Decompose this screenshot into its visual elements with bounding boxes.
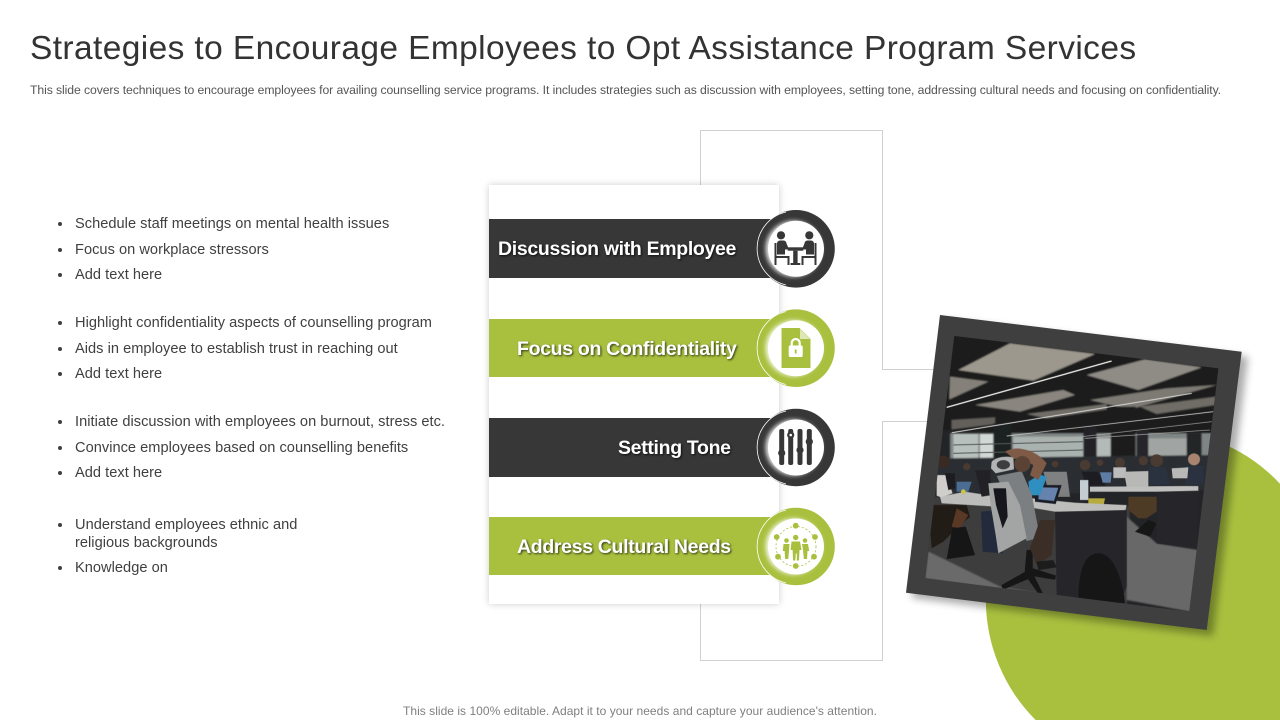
- ceiling: [943, 336, 1218, 434]
- title: Strategies to Encourage Employees to Opt Assistance Program Services: [30, 30, 1136, 67]
- rear trouser legs: [981, 510, 1003, 553]
- bullet: Understand employees ethnic and: [75, 517, 297, 533]
- left person: [937, 475, 953, 497]
- bar: focus on confidentiality: [489, 319, 775, 377]
- bar: setting tone: Setting Tone: [618, 437, 731, 459]
- shoes and legs: [1030, 520, 1055, 565]
- raised arms and head: [1005, 449, 1047, 480]
- rear desk: [1090, 486, 1198, 492]
- bullet: Initiate discussion with employees on burnout, stress etc.: [75, 414, 445, 430]
- bullet: Focus on workplace stressors: [75, 242, 269, 258]
- bullet: Aids in employee to establish trust in reaching out: [75, 341, 398, 357]
- bullet: Add text here: [75, 465, 162, 481]
- backpack: [947, 527, 975, 559]
- bullet: Add text here: [75, 366, 162, 382]
- framed photo: [906, 315, 1252, 640]
- bullet: Highlight confidentiality aspects of counselling program: [75, 315, 432, 331]
- icon: locked document: [757, 309, 835, 387]
- connector frame: [700, 130, 934, 661]
- bar: address cultural needs: Address Cultural Needs: [517, 536, 731, 558]
- icon: meeting at table: [757, 210, 835, 288]
- icon: sliders: [757, 409, 835, 486]
- water bottle and fruit: [1080, 480, 1088, 500]
- white panel: [489, 185, 779, 604]
- left-person legs: [930, 505, 970, 548]
- bullet list: [58, 216, 445, 576]
- bullet: Schedule staff meetings on mental health issues: [75, 216, 389, 232]
- chair back: [988, 482, 1027, 553]
- front-left desk: [940, 492, 1127, 517]
- icon badges: [756, 210, 835, 586]
- screens: [957, 482, 972, 492]
- photo frame: [906, 315, 1242, 630]
- description: This slide covers techniques to encourage employees for availing counselling service programs. It includes strategies such as discussion with employees, setting tone, addressing cultural needs and focusing on confidentiality.: [30, 83, 1221, 97]
- front desk pedestal: [1055, 510, 1127, 603]
- blue shirt: [1028, 474, 1047, 495]
- bullet: Convince employees based on counselling benefits: [75, 440, 408, 456]
- footer note: This slide is 100% editable. Adapt it to your needs and capture your audience's attention.: [403, 704, 877, 718]
- office photograph: [926, 336, 1218, 612]
- bar: focus on confidentiality: Focus on Confidentiality: [517, 338, 737, 360]
- seated person torso: [997, 471, 1040, 541]
- crowd band and floor: [933, 455, 1210, 497]
- windows: [950, 433, 1213, 460]
- bar: discussion with employee: Discussion with Employee: [498, 238, 736, 260]
- bar: setting tone: [489, 418, 775, 477]
- bar: address cultural needs: [489, 517, 775, 575]
- background people: [938, 454, 1163, 470]
- chair base: [1001, 550, 1056, 594]
- light strips: [947, 361, 1112, 407]
- headrest: [991, 457, 1014, 473]
- bullet: Knowledge on: [75, 560, 168, 576]
- laptops: [1124, 471, 1148, 487]
- bar: discussion with employee: [489, 219, 775, 278]
- bullet continuation: religious backgrounds: [75, 535, 218, 551]
- photo shadow: [912, 320, 1248, 636]
- icon: people network: [757, 508, 835, 585]
- bullet: Add text here: [75, 267, 162, 283]
- pillars: [993, 423, 1012, 460]
